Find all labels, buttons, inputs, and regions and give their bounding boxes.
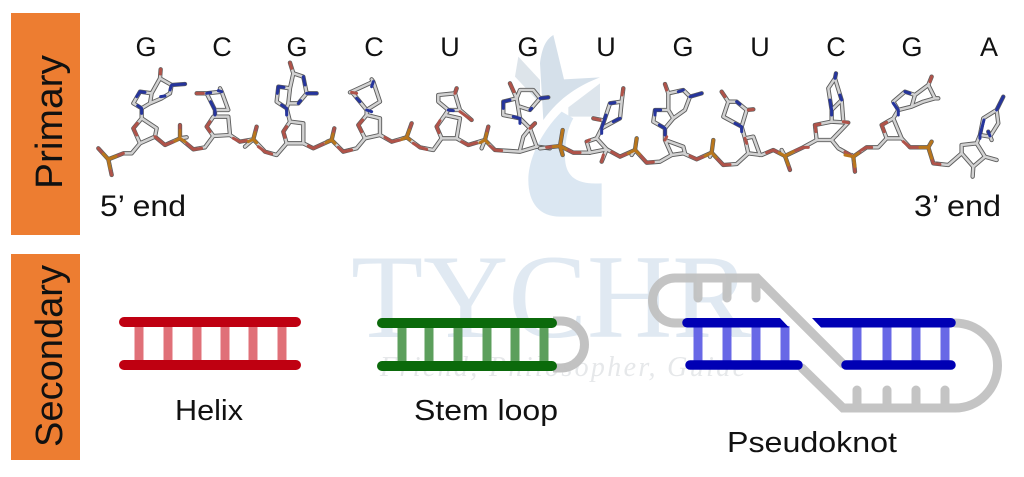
nucleotide sequence letters: G <box>672 32 694 62</box>
heading: Secondary: Secondary <box>29 265 71 447</box>
label: 3 prime end: 3’ end <box>914 190 1001 223</box>
nucleotide sequence letters: G <box>286 32 308 62</box>
nucleotide sequence letters: G <box>517 32 539 62</box>
nucleotide sequence letters: G <box>901 32 923 62</box>
nucleotide sequence letters: U <box>750 32 770 62</box>
blue strands <box>682 318 956 328</box>
chart: primary structure molecule, left half <box>98 63 550 175</box>
nucleotide sequence letters <box>135 32 998 62</box>
label: Pseudoknot: Pseudoknot <box>727 427 897 459</box>
label: 5 prime end: 5’ end <box>100 190 186 223</box>
label: Stem loop: Stem loop <box>414 395 558 427</box>
watermark: TYCHR logo mark <box>515 35 602 217</box>
watermark: tagline: Friend, Philosopher, Guide <box>379 352 745 383</box>
nucleotide sequence letters: U <box>596 32 616 62</box>
nucleotide sequence letters: C <box>826 32 846 62</box>
diagram: helix <box>124 322 296 365</box>
nucleotide sequence letters: U <box>440 32 460 62</box>
grey backbone <box>652 278 998 408</box>
watermark: TYCHR wordmark: TYCHR <box>351 230 751 363</box>
base pairs <box>698 326 945 362</box>
nucleotide sequence letters: C <box>212 32 232 62</box>
label: Helix: Helix <box>175 395 244 427</box>
nucleotide sequence letters: C <box>364 32 384 62</box>
chart: primary structure molecule, right half <box>540 73 1003 177</box>
panel: primary label <box>11 13 80 235</box>
diagram: pseudoknot <box>652 278 998 408</box>
heading: Primary: Primary <box>29 55 71 189</box>
panel: secondary label <box>11 254 80 460</box>
nucleotide sequence letters: A <box>980 32 998 62</box>
nucleotide sequence letters: G <box>135 32 157 62</box>
diagram: stem loop <box>382 321 584 368</box>
